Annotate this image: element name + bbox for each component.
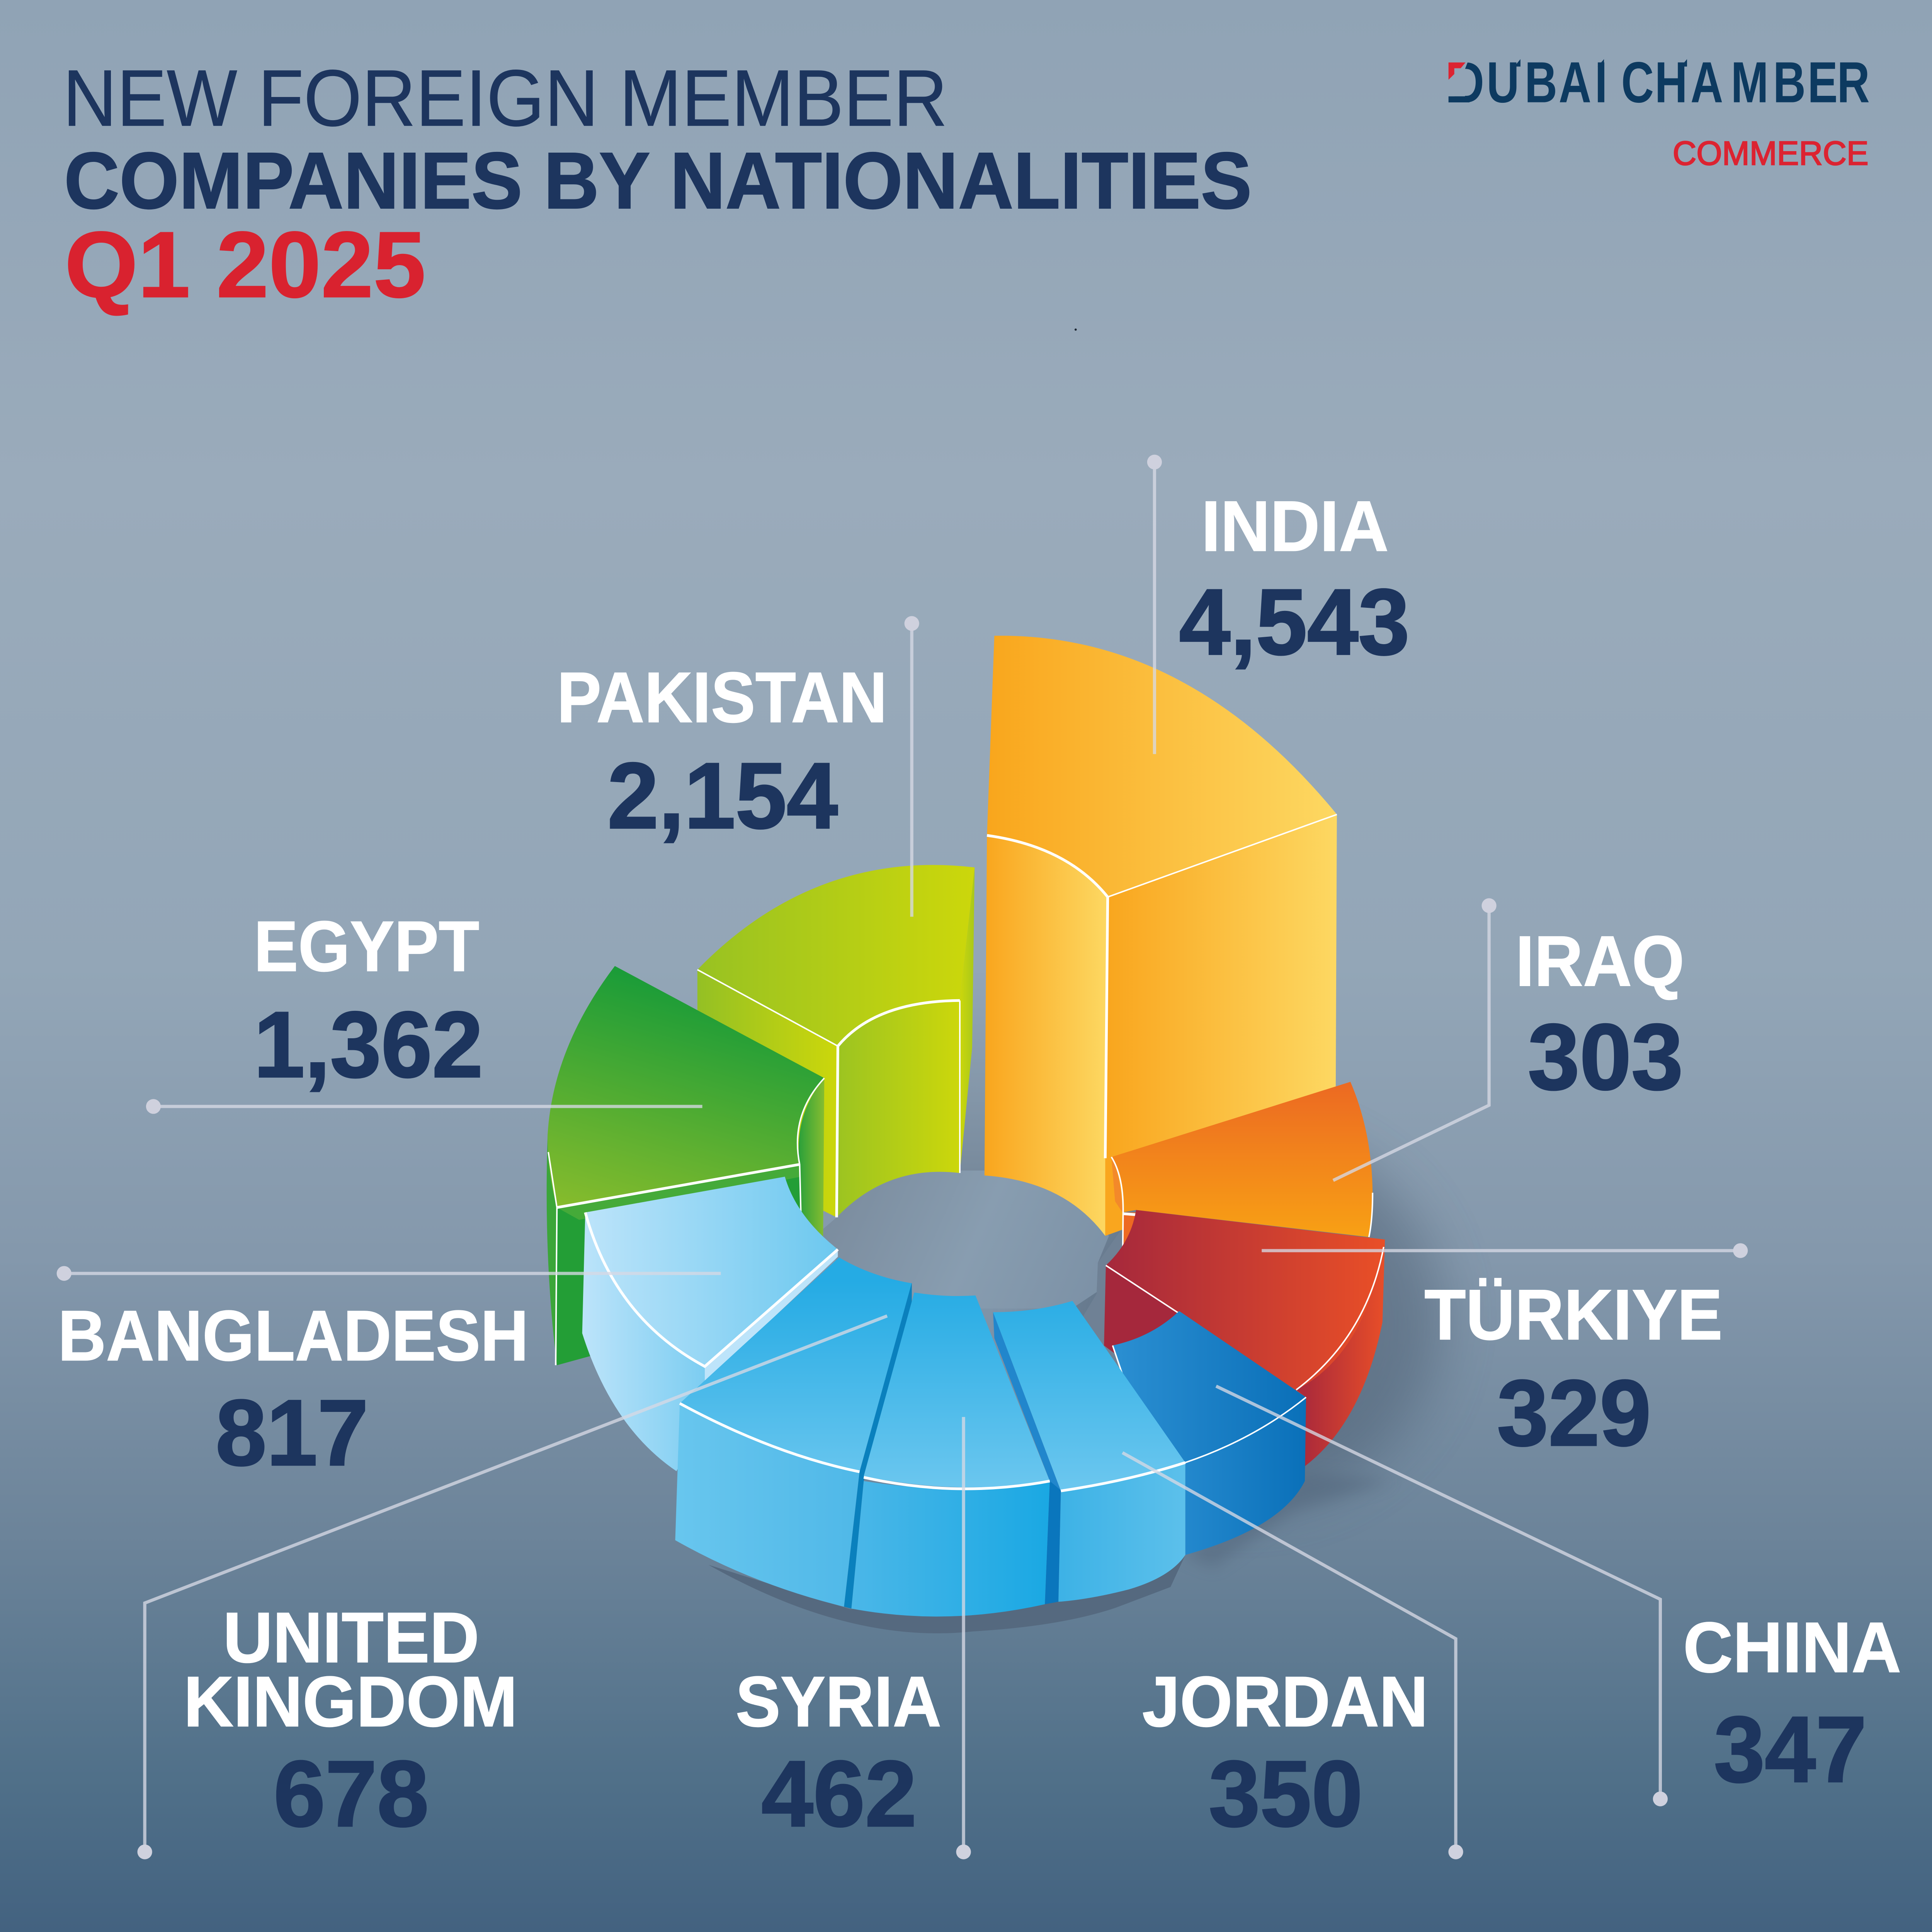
chart shadow right [1047, 1134, 1442, 1503]
segment: India [985, 636, 1337, 1236]
segment: Bangladesh [582, 1177, 838, 1471]
label: Iraq [1515, 922, 1684, 1109]
label: Bangladesh [58, 1296, 529, 1485]
chart shadow bottom [709, 1555, 1185, 1633]
label: Egypt [254, 907, 483, 1097]
title [63, 53, 1252, 317]
segment: Jordan [993, 1301, 1185, 1604]
label: China: 347 [1714, 1697, 1867, 1802]
logo tick on H [1681, 59, 1687, 66]
segment: China [1112, 1311, 1306, 1555]
label: Egypt: EGYPT [254, 907, 479, 986]
callout: United Kingdom [138, 1316, 887, 1859]
label: Bangladesh: 817 [216, 1381, 368, 1485]
3D ring chart [547, 636, 1442, 1633]
callout: China [1216, 1386, 1668, 1806]
callout: Türkiye [1262, 1243, 1748, 1258]
callout: Jordan [1122, 1453, 1463, 1859]
logo wordmark: DUBAI CHAMBER [1451, 50, 1870, 115]
label: United Kingdom [184, 1598, 517, 1846]
callout: Egypt [146, 1099, 702, 1114]
centre hole [820, 1170, 1109, 1308]
segment: Egypt [547, 966, 824, 1365]
logo D base bar [1449, 96, 1469, 102]
callout: Pakistan [905, 616, 919, 917]
stray dot [1075, 328, 1077, 331]
label: Syria: SYRIA [736, 1662, 941, 1742]
label: Türkiye: 329 [1497, 1361, 1651, 1465]
logo D stem cut-out [1444, 58, 1469, 96]
label: China: CHINA [1683, 1608, 1901, 1687]
label: Jordan [1142, 1662, 1428, 1846]
segment: Syria [851, 1293, 1050, 1617]
label: Türkiye [1424, 1275, 1723, 1465]
label: China [1683, 1608, 1901, 1802]
segment: Türkiye [1104, 1210, 1385, 1466]
logo red corner [1449, 63, 1466, 80]
title line 1: NEW FOREIGN MEMBER [63, 53, 947, 143]
label: Bangladesh: BANGLADESH [58, 1296, 529, 1376]
logo tick on I [1598, 59, 1604, 66]
segment: United Kingdom [675, 1257, 912, 1609]
label: United Kingdom: UNITED [223, 1598, 479, 1678]
label: United Kingdom: KINGDOM [184, 1662, 517, 1742]
callout: Bangladesh [57, 1266, 721, 1281]
label: Türkiye: TÜRKIYE [1424, 1275, 1723, 1355]
label: Syria: 462 [762, 1742, 917, 1846]
chart shadow bottom right [1183, 1473, 1392, 1567]
callout: Iraq [1333, 898, 1497, 1180]
label: Pakistan: 2,154 [607, 744, 838, 848]
label: Iraq: 303 [1528, 1005, 1683, 1109]
title line 3: period: Q1 2025 [65, 213, 426, 317]
label: Syria [736, 1662, 941, 1846]
label: Jordan: JORDAN [1142, 1662, 1428, 1742]
segment: Pakistan [697, 865, 975, 1218]
callout: India [1147, 455, 1162, 754]
title line 2: COMPANIES BY NATIONALITIES [64, 136, 1252, 225]
label: Jordan: 350 [1209, 1742, 1363, 1846]
shadow right of hole [1060, 1226, 1124, 1368]
logo tick on U [1514, 59, 1520, 66]
label: India [1179, 486, 1410, 674]
label: India: 4,543 [1179, 570, 1410, 674]
label: United Kingdom: 678 [274, 1742, 429, 1846]
label: Pakistan: PAKISTAN [557, 658, 887, 738]
callout: Syria [956, 1417, 971, 1859]
label: Iraq: IRAQ [1515, 922, 1684, 1001]
logo: Dubai Chamber Commerce [1444, 50, 1870, 172]
label: Egypt: 1,362 [254, 993, 483, 1097]
shadow between segments [960, 973, 987, 1177]
segment: Iraq [1111, 1082, 1372, 1287]
label: India: INDIA [1201, 486, 1389, 566]
logo division name: COMMERCE [1673, 134, 1869, 172]
label: Pakistan [557, 658, 887, 848]
